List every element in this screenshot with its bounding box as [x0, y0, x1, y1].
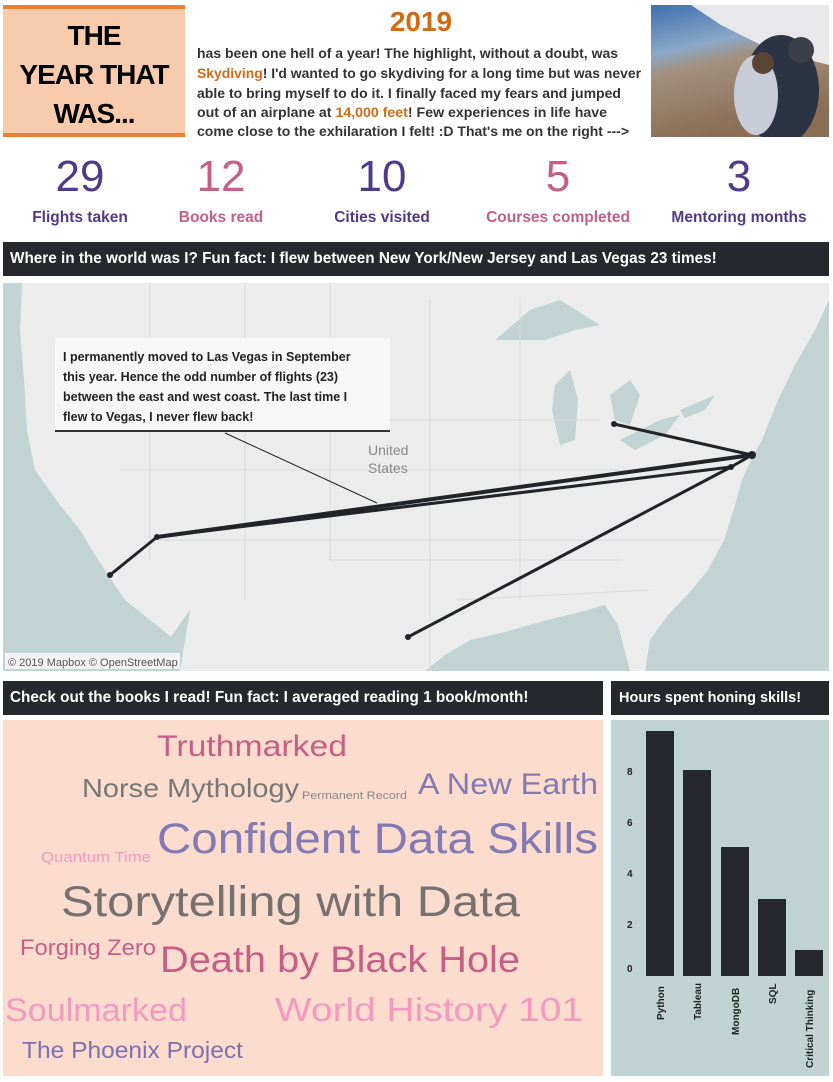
bar chart: hours: 4: [627, 869, 633, 880]
stat: mentoring: 3: [727, 152, 751, 201]
map annotation callout: this year. Hence the odd number of flights (23): [63, 370, 338, 384]
bar chart: hours: SQL: [768, 983, 779, 1004]
skills heading: [611, 681, 829, 715]
stat: cities: 10: [358, 152, 406, 201]
map heading: Where in the world was I? Fun fact: I flew between New York/New Jersey and Las Vegas 23 times!: [10, 250, 717, 267]
stat: books: 12: [197, 152, 245, 201]
bar chart: hours: [611, 720, 829, 1076]
word cloud: [3, 720, 603, 1076]
books heading: Check out the books I read! Fun fact: I averaged reading 1 book/month!: [10, 689, 528, 706]
flight routes: [110, 424, 752, 637]
stat: mentoring: Mentoring months: [671, 209, 807, 226]
bar chart: hours: Critical Thinking: [805, 990, 816, 1068]
word cloud: Norse Mythology: [82, 773, 299, 803]
intro paragraph: has been one hell of a year! The highlight, without a doubt, was: [197, 46, 618, 61]
photo: skydiving: [651, 5, 829, 137]
word cloud: Truthmarked: [157, 730, 347, 763]
map annotation callout: between the east and west coast. The last time I: [63, 390, 347, 404]
word cloud: Death by Black Hole: [160, 939, 520, 980]
great lakes: [160, 300, 715, 671]
stat: courses: [486, 152, 630, 226]
intro paragraph: Skydiving! I'd wanted to go skydiving for a long time but was never: [197, 66, 642, 81]
stat: mentoring: [671, 152, 807, 226]
word cloud: World History 101: [275, 991, 583, 1028]
map: States: [368, 460, 408, 476]
stat: courses: 5: [546, 152, 570, 201]
stat: books: [179, 152, 263, 226]
map: [3, 283, 829, 671]
bar chart: hours: 0: [627, 964, 633, 975]
stat: cities: [334, 152, 430, 226]
word cloud: The Phoenix Project: [22, 1037, 244, 1063]
word cloud: Storytelling with Data: [61, 878, 520, 926]
stat: books: Books read: [179, 209, 263, 226]
intro paragraph: [197, 46, 642, 139]
skills heading: Hours spent honing skills!: [619, 690, 801, 706]
stat: flights: [32, 152, 128, 226]
bar chart: hours: Tableau: [693, 983, 704, 1020]
intro paragraph: come close to the exhilaration I felt! :D That's me on the right --->: [197, 124, 629, 139]
title box: THE: [68, 20, 120, 51]
word cloud: Confident Data Skills: [157, 815, 598, 863]
annotation leader line: [225, 433, 377, 503]
title box: [3, 5, 185, 137]
stat: courses: Courses completed: [486, 209, 630, 226]
title box: WAS...: [53, 98, 135, 129]
map annotation callout: flew to Vegas, I never flew back!: [63, 410, 253, 424]
intro paragraph: out of an airplane at 14,000 feet! Few experiences in life have: [197, 105, 608, 120]
attribution: © 2019 Mapbox © OpenStreetMap: [8, 657, 178, 669]
map annotation callout: [55, 338, 390, 432]
books heading: [3, 681, 603, 715]
stat: cities: Cities visited: [334, 209, 430, 226]
stat: flights: 29: [56, 152, 104, 201]
year heading: 2019: [390, 6, 452, 37]
bar chart: hours: 8: [627, 767, 633, 778]
stat: flights: Flights taken: [32, 209, 128, 226]
stats row: [32, 152, 807, 226]
title box: YEAR THAT: [19, 59, 169, 90]
bar chart: hours: MongoDB: [731, 988, 742, 1035]
bar chart: hours: 6: [627, 818, 633, 829]
word cloud: Permanent Record: [302, 790, 407, 802]
map annotation callout: I permanently moved to Las Vegas in September: [63, 350, 351, 364]
intro paragraph: able to bring myself to do it. I finally faced my fears and jumped: [197, 86, 621, 101]
bar chart: hours: Python: [656, 986, 667, 1020]
word cloud: Quantum Time: [41, 849, 151, 866]
bar chart: hours: 2: [627, 920, 633, 931]
word cloud: Soulmarked: [5, 992, 187, 1028]
word cloud: A New Earth: [418, 768, 598, 801]
word cloud: Forging Zero: [20, 935, 156, 960]
label: United States: United: [368, 442, 408, 458]
map heading: [3, 242, 829, 276]
